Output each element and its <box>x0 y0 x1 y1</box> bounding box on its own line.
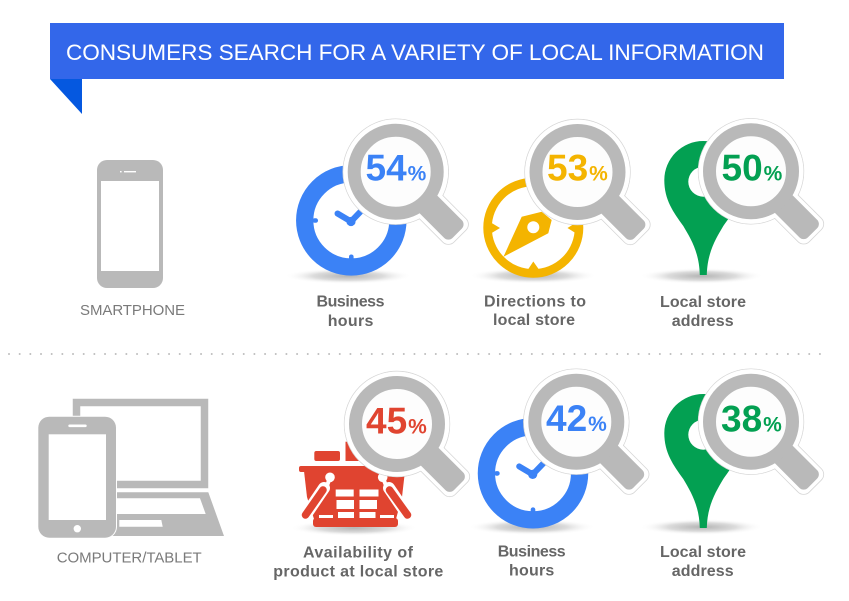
icon: map pin <box>664 394 742 528</box>
shadow <box>284 268 412 284</box>
label: Local store <box>660 544 746 561</box>
shadow <box>290 520 418 536</box>
value 50%: 50% <box>722 148 783 189</box>
label: hours <box>509 563 554 580</box>
value 53%: 53% <box>547 148 608 189</box>
label: address <box>672 563 734 580</box>
shadow <box>640 268 764 284</box>
value 38%: 38% <box>721 399 782 440</box>
icon: clock <box>486 427 580 520</box>
label: Directions to <box>484 294 586 310</box>
value 54%: 54% <box>366 148 427 189</box>
icon: magnifier <box>524 369 652 498</box>
shadow <box>640 519 764 535</box>
icon: compass <box>488 182 579 273</box>
label: smartphone: SMARTPHONE <box>80 302 185 319</box>
label: Business <box>316 294 385 311</box>
divider dots <box>9 353 822 355</box>
label: address <box>672 313 734 330</box>
item: directions smartphone 53% <box>469 119 654 329</box>
icon: computer and tablet <box>37 402 224 539</box>
banner fold <box>50 79 82 114</box>
label: hours <box>328 313 373 330</box>
item: product availability computer 45% <box>273 371 473 581</box>
title: CONSUMERS SEARCH FOR A VARIETY OF LOCAL INFORMATION <box>66 40 764 65</box>
item: local store address computer 38% <box>640 369 827 580</box>
value 45%: 45% <box>366 400 427 441</box>
icon: magnifier <box>525 119 654 248</box>
icon: smartphone <box>97 160 163 288</box>
item: local store address smartphone 50% <box>640 118 827 330</box>
label: Availability of <box>303 545 414 562</box>
icon: clock <box>305 174 398 267</box>
item: business hours computer 42% <box>468 369 652 580</box>
icon: magnifier <box>698 118 827 247</box>
label: Local store <box>660 294 746 311</box>
value 42%: 42% <box>546 398 607 439</box>
item: business hours smartphone 54% <box>284 119 472 330</box>
label: product at local store <box>273 564 443 581</box>
shadow <box>469 268 597 284</box>
label: local store <box>493 312 575 329</box>
icon: magnifier <box>343 119 472 248</box>
icon: basket <box>299 442 410 527</box>
label: computer/tablet: COMPUTER/TABLET <box>57 549 202 566</box>
title banner <box>50 23 784 114</box>
shadow <box>468 519 596 535</box>
icon: magnifier <box>698 369 827 498</box>
icon: magnifier <box>344 371 473 500</box>
label: Business <box>498 544 566 561</box>
icon: map pin <box>664 141 742 275</box>
